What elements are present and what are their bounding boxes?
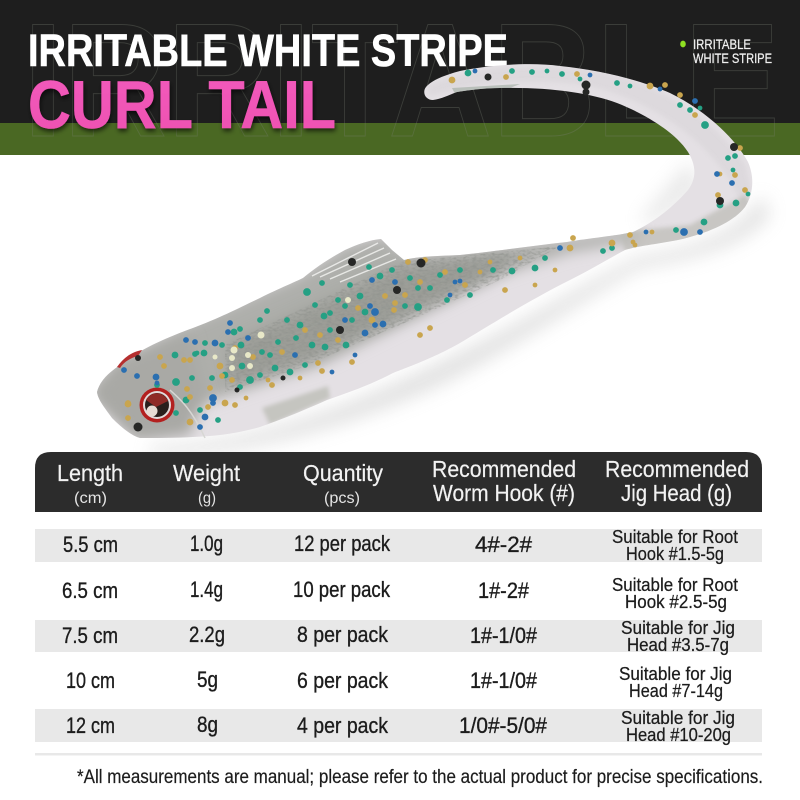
- table header bar: Quantity: [303, 460, 383, 486]
- mottled flank: [230, 252, 520, 385]
- row: 5.5 cm: Hook #1.5-5g: [626, 543, 724, 564]
- icon: top red eye bump: [117, 350, 142, 368]
- row: 10 cm: 6 per pack: [297, 668, 389, 693]
- row: 12 cm: [35, 707, 762, 745]
- row: 7.5 cm: 1#-1/0#: [470, 623, 537, 648]
- lure soft shadow: [150, 160, 770, 455]
- product label: [680, 36, 772, 66]
- row: 10 cm: 5g: [197, 667, 218, 692]
- head fold: [170, 390, 205, 438]
- row: 12 cm: Suitable for Jig: [621, 707, 735, 728]
- row: 10 cm: 10 cm: [66, 668, 115, 693]
- table header bar: Length: [57, 460, 123, 486]
- tail shading: [588, 70, 620, 76]
- row: 5.5 cm: [35, 526, 762, 564]
- table header bar: (g): [198, 490, 216, 507]
- title: irritable white stripe: IRRITABLE WHITE STRIPE: [28, 25, 508, 76]
- table header bar: Jig Head (g): [621, 480, 732, 506]
- row: 7.5 cm: Head #3.5-7g: [627, 634, 729, 655]
- table header bar: Weight: [173, 460, 241, 486]
- row: 7.5 cm: [35, 617, 762, 655]
- row: 5.5 cm: Suitable for Root: [612, 526, 738, 547]
- row: 6.5 cm: 1#-2#: [478, 578, 529, 603]
- row: 10 cm: 1#-1/0#: [470, 668, 537, 693]
- row: 6.5 cm: Hook #2.5-5g: [625, 591, 727, 612]
- row: 10 cm: Suitable for Jig: [619, 663, 732, 684]
- head shading: [97, 346, 207, 438]
- specification table: [35, 452, 762, 756]
- row: 5.5 cm: 12 per pack: [294, 531, 391, 556]
- belly fin: [262, 386, 330, 425]
- row: 10 cm: [66, 663, 732, 701]
- row: 6.5 cm: 10 per pack: [293, 577, 391, 602]
- title: curl tail: CURL TAIL: [28, 67, 336, 143]
- row: 7.5 cm: Suitable for Jig: [621, 617, 735, 638]
- glitter: black: [134, 74, 738, 432]
- product label: IRRITABLE: [693, 36, 751, 52]
- row: 12 cm: 12 cm: [66, 713, 115, 738]
- row: 7.5 cm: 8 per pack: [297, 622, 389, 647]
- product label: WHITE STRIPE: [693, 50, 772, 66]
- row: 6.5 cm: Suitable for Root: [612, 574, 738, 595]
- glitter: gold: [125, 72, 748, 425]
- dorsal fin ribs: [312, 243, 396, 282]
- icon: green bullet: [680, 41, 686, 47]
- glitter: teal: [154, 68, 750, 422]
- table header bar: (pcs): [324, 490, 360, 507]
- row: 5.5 cm: 4#-2#: [475, 532, 532, 557]
- row: 7.5 cm: 7.5 cm: [62, 623, 118, 648]
- icon: lure eye: [140, 388, 174, 422]
- row: 6.5 cm: [62, 574, 738, 612]
- table header bar: Recommended: [605, 456, 749, 482]
- table header bar: Recommended: [432, 456, 576, 482]
- soft curl tail lure illustration: [90, 64, 755, 442]
- row: 5.5 cm: 5.5 cm: [63, 532, 118, 557]
- glitter: blue: [122, 69, 734, 430]
- row: 12 cm: Head #10-20g: [626, 724, 731, 745]
- table header bar: (cm): [74, 490, 107, 507]
- lure body silhouette: [97, 64, 752, 438]
- row: 12 cm: 8g: [197, 712, 218, 737]
- row: 6.5 cm: 1.4g: [190, 577, 223, 602]
- header banner: [0, 0, 800, 171]
- back shading: [90, 228, 640, 425]
- glitter: pale: [212, 297, 351, 371]
- table header bar: Worm Hook (#): [433, 480, 575, 506]
- table header bar: [35, 452, 762, 512]
- row: 12 cm: 1/0#-5/0#: [459, 713, 547, 738]
- row: 12 cm: 4 per pack: [297, 713, 389, 738]
- row: 5.5 cm: 1.0g: [190, 531, 223, 556]
- row: 6.5 cm: 6.5 cm: [62, 578, 118, 603]
- row: 7.5 cm: 2.2g: [189, 622, 225, 647]
- row: 10 cm: Head #7-14g: [629, 680, 723, 701]
